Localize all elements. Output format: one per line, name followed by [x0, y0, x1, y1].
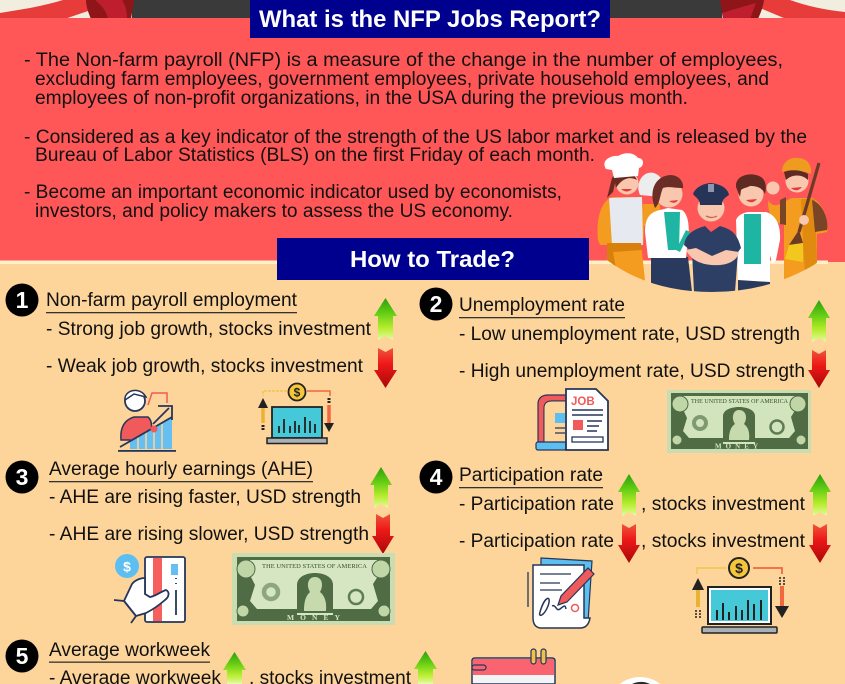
line: high unemployment: - High unemployment rate, USD strength	[459, 361, 805, 382]
arrow: down	[809, 524, 831, 563]
heading 5: Average workweek	[49, 640, 210, 661]
icon: dollar bill (section 2): MONEY	[715, 442, 758, 450]
line: AHE rising faster: - AHE are rising faster, USD strength	[49, 487, 361, 508]
number badge 3	[6, 460, 38, 494]
icon: dollar bill (section 2)	[667, 390, 811, 453]
arrow: up	[808, 300, 830, 342]
worker: waiter behind	[638, 173, 662, 226]
text block: key indicator: - Considered as a key indicator of the strength of the US labor market and is released by the	[24, 127, 807, 148]
icon: job listing document: JOB	[571, 396, 595, 408]
arrow: up	[618, 474, 640, 516]
icon: dollar bill (section 3)	[232, 553, 395, 625]
icon: person with growth chart	[118, 390, 176, 452]
title: What is the NFP Jobs Report?	[259, 6, 601, 33]
number badge 4	[420, 460, 452, 494]
line: weak job growth: - Weak job growth, stocks investment	[46, 356, 364, 377]
icon: laptop with dollar and arrows (section 4)	[692, 558, 789, 633]
heading 1: Non-farm payroll employment	[46, 290, 298, 311]
icon: signed document	[528, 558, 594, 628]
section 4: participation rate	[420, 460, 831, 563]
text block: economic indicator: investors, and policy makers to assess the US economy.	[35, 201, 513, 222]
number badge 2	[420, 288, 452, 320]
worker: doctor woman	[645, 175, 692, 292]
line: low unemployment: - Low unemployment rate, USD strength	[459, 324, 800, 345]
text block: economic indicator	[24, 182, 562, 222]
arrow: up	[370, 467, 392, 508]
text block: key indicator	[24, 127, 807, 166]
text block: NFP definition: - The Non-farm payroll (NFP) is a measure of the change in the number of employees,	[24, 50, 783, 71]
number badge 2: 2	[430, 291, 442, 317]
section 2: unemployment rate	[420, 288, 830, 388]
label: stocks investment: , stocks investment	[641, 494, 806, 515]
number badge 5: 5	[16, 643, 29, 669]
heading: How to Trade?: How to Trade?	[350, 246, 515, 272]
icon: job listing document	[536, 389, 608, 450]
arrow: up	[374, 298, 397, 340]
icon: dollar bill (section 3): THE UNITED STATES OF AMERICA	[262, 563, 367, 570]
heading 3: Average hourly earnings (AHE)	[49, 459, 313, 480]
icon: laptop with dollar and arrows (section 1)	[258, 384, 334, 444]
text block: NFP definition	[24, 50, 783, 109]
worker: street sweeper	[766, 158, 828, 285]
line: participation rate up: - Participation rate	[459, 494, 614, 515]
worker: doctor man	[736, 174, 780, 292]
heading: How to Trade?	[277, 238, 589, 280]
heading 2: Unemployment rate	[459, 295, 625, 316]
text block: economic indicator: - Become an important economic indicator used by economists,	[24, 182, 562, 203]
icon: hand holding credit card: $	[123, 558, 131, 574]
label: stocks investment: , stocks investment	[641, 531, 806, 552]
line: strong job growth: - Strong job growth, stocks investment	[46, 319, 372, 340]
icon: laptop with dollar and arrows (section 4): $	[735, 560, 743, 576]
icon: calendar	[472, 649, 555, 684]
number badge 5	[6, 640, 38, 672]
worker: chef	[598, 153, 646, 290]
arrow: down	[372, 514, 394, 554]
icon: dollar bill (section 2): THE UNITED STATES OF AMERICA	[691, 399, 789, 405]
number badge 4: 4	[430, 464, 443, 490]
title	[250, 0, 610, 38]
text block: NFP definition: excluding farm employees, government employees, private household employees, and	[35, 69, 769, 90]
arrow: up	[223, 652, 246, 684]
arrow: down	[808, 350, 830, 388]
section 5: average workweek	[6, 640, 437, 684]
illustration: group of workers	[598, 153, 828, 292]
line: AHE rising slower: - AHE are rising slower, USD strength	[49, 524, 369, 545]
icon: clock top edge	[620, 677, 660, 684]
icon: hand holding credit card	[114, 554, 185, 623]
header banner strip	[0, 0, 845, 19]
red intro panel	[0, 18, 845, 262]
arrow: up	[414, 651, 437, 684]
icon: laptop with dollar and arrows (section 1): $	[294, 386, 301, 400]
text block: NFP definition: employees of non-profit organizations, in the USA during the previous month.	[35, 88, 688, 109]
text block: key indicator: Bureau of Labor Statistics (BLS) on the first Friday of each month.	[35, 145, 595, 166]
number badge 1: 1	[16, 287, 29, 313]
arrow: down	[618, 524, 640, 563]
number badge 1	[6, 284, 38, 316]
arrow: down	[374, 348, 397, 388]
number badge 3: 3	[16, 464, 28, 490]
worker: police officer	[684, 183, 741, 292]
section 1: non-farm payroll employment	[6, 284, 397, 388]
heading 4: Participation rate	[459, 465, 603, 486]
section 3: average hourly earnings	[6, 459, 394, 554]
divider band under the red panel	[0, 260, 828, 264]
arrow: up	[809, 474, 831, 516]
line: participation rate down: - Participation rate	[459, 531, 614, 552]
icon: dollar bill (section 3): MONEY	[287, 613, 341, 622]
